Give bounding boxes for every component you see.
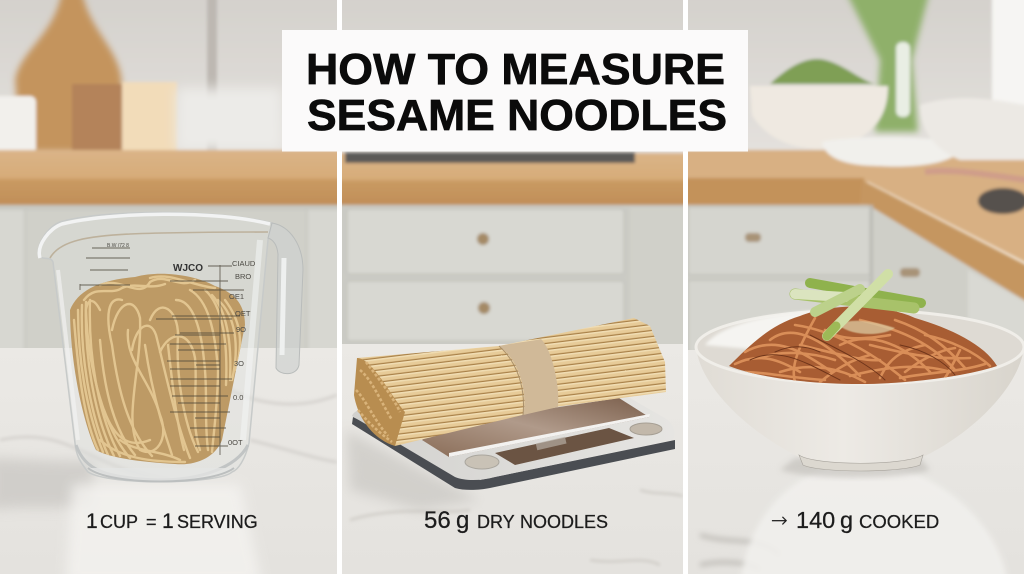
cabinets [675,205,1024,360]
title text: SESAME NOODLES [307,92,727,140]
glass rim [39,214,270,258]
glass base [76,444,250,468]
marble counter [342,344,683,574]
panel: bowl [675,0,1024,574]
bowl noodle strands [735,318,990,382]
icon: glass measuring cup with noodles: 9O [236,325,246,334]
title banner [282,30,748,152]
vase with greens [845,0,930,132]
left glass highlight [58,270,78,440]
marble counter [688,350,1024,574]
bundle cut ends [354,358,405,446]
caption: 56 g dry noodles: 56 [424,507,451,534]
icon: dry noodle bundle [354,318,666,446]
caption: 1 cup = 1 serving: 1 [86,510,98,533]
panel: kitchen scale [330,0,695,574]
icon: bowl of sesame noodles [696,274,1024,471]
caption: 56 g dry noodles: NOODLES [520,512,608,532]
white bowls [750,86,888,149]
scale display [495,428,634,465]
icon: glass measuring cup with noodles: CIAUD [232,259,256,268]
wood counter [675,150,1024,270]
scale top [352,405,582,480]
scale platform [422,398,649,457]
scale labels: WJCO [173,263,203,274]
counter items [925,171,1024,182]
noodle mound [729,306,997,384]
bowl inner light [705,310,830,350]
bowl body [696,347,1024,468]
noodle mass [70,274,245,464]
caption: 56 g dry noodles: DRY [477,512,515,532]
icon: glass measuring cup with noodles: 0.0 [233,393,243,402]
glass body [38,212,272,482]
noodle strands [74,276,240,462]
caption: 140 g cooked: COOKED [859,511,939,532]
right glass highlight [243,240,260,440]
icon: glass measuring cup with noodles: OET [235,309,251,318]
scale buttons [465,455,499,469]
caption: 140 g cooked: 140 [796,507,835,533]
bowl rim [696,310,1024,384]
caption: 1 cup = 1 serving: CUP [100,512,138,532]
scale base shadow edge [352,417,675,490]
bundle strands [357,318,666,446]
icon: digital scale [352,395,675,490]
title text: HOW TO MEASURE [306,46,725,94]
icon: glass measuring cup with noodles: 0OT [228,438,243,447]
marble counter [0,348,337,574]
sesame seeds [838,321,895,334]
paper band [499,339,558,415]
caption: 140 g cooked: g [840,507,853,533]
caption: 1 cup = 1 serving: 1 [162,510,174,533]
background: blurred kitchen middle [342,0,683,344]
bowl foot [799,455,923,471]
icon: glass measuring cup with noodles: B.W /72 8 [107,243,129,249]
cup handle [268,223,303,374]
caption: 56 g dry noodles: g [456,507,469,534]
caption: 1 cup = 1 serving: SERVING [177,512,258,532]
background: blurred kitchen left [0,0,352,360]
green onions [795,274,921,336]
icon: glass measuring cup with noodles [38,212,303,482]
icon: glass measuring cup with noodles: OE1 [229,292,244,301]
caption: 1 cup = 1 serving: = [146,512,157,532]
measurement scale [80,248,244,455]
icon: glass measuring cup with noodles: 3O [234,359,244,368]
icon: glass measuring cup with noodles: BRO [235,272,251,281]
background: blurred kitchen right [675,0,1024,360]
window [992,0,1024,105]
caption: 140 g cooked: → [771,508,788,532]
panel: measuring cup [0,0,352,574]
